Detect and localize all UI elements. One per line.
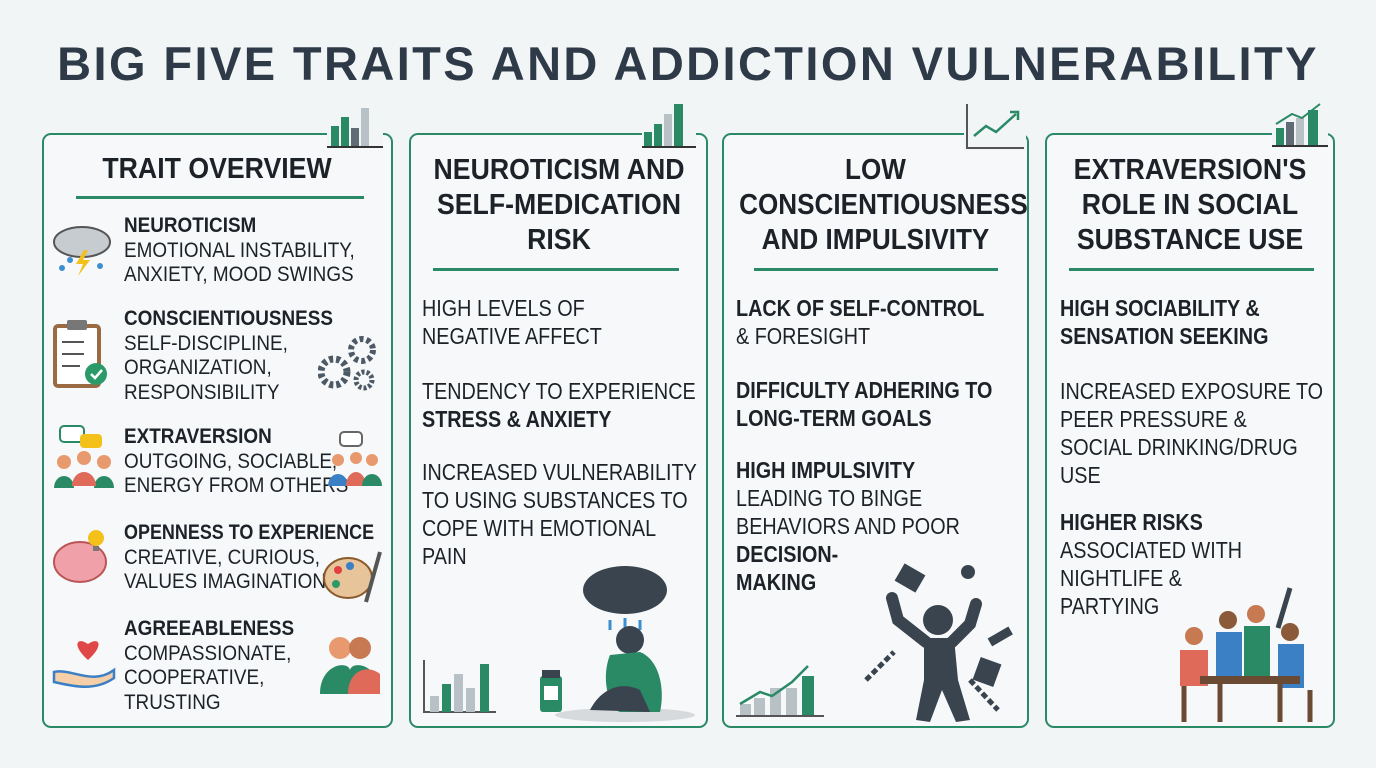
illustration: sad person with cloud bbox=[540, 566, 695, 722]
item: agreeableness: COOPERATIVE, bbox=[124, 666, 264, 689]
panel: neuroticism bbox=[409, 133, 708, 728]
icon: clipboard bbox=[53, 320, 107, 388]
chart: panel 2 small bars bbox=[423, 660, 496, 713]
item: neuroticism: NEUROTICISM bbox=[124, 214, 256, 237]
chart: growth bars bbox=[736, 665, 824, 717]
heading: SELF-MEDICATION bbox=[437, 189, 681, 221]
body text 3: PARTYING bbox=[1060, 593, 1159, 619]
body text 2: STRESS & ANXIETY bbox=[422, 406, 611, 432]
body text 3: TO USING SUBSTANCES TO bbox=[422, 487, 688, 513]
heading: EXTRAVERSION'S bbox=[1074, 154, 1306, 186]
heading: CONSCIENTIOUSNESS bbox=[739, 189, 1028, 221]
item: openness: VALUES IMAGINATION bbox=[124, 570, 326, 593]
body text 2: SOCIAL DRINKING/DRUG bbox=[1060, 434, 1298, 460]
icon: storm cloud bbox=[53, 226, 111, 276]
item: conscientiousness: RESPONSIBILITY bbox=[124, 380, 279, 404]
body text 3 bbox=[736, 457, 960, 595]
body text 3: INCREASED VULNERABILITY bbox=[422, 459, 697, 485]
body text 3 bbox=[1060, 509, 1242, 619]
body text 2: PEER PRESSURE & bbox=[1060, 406, 1247, 432]
body text 1: & FORESIGHT bbox=[736, 323, 870, 349]
icon: people chat bbox=[54, 425, 114, 488]
heading: SUBSTANCE USE bbox=[1077, 224, 1303, 256]
icon: gears bbox=[318, 336, 376, 390]
body text 2: LONG-TERM GOALS bbox=[736, 405, 932, 431]
body text 2: DIFFICULTY ADHERING TO bbox=[736, 377, 992, 403]
body text 3: COPE WITH EMOTIONAL bbox=[422, 515, 656, 541]
illustration: party group bbox=[1180, 587, 1312, 722]
panel: trait overview bbox=[42, 133, 393, 728]
panel: extraversion bbox=[1045, 133, 1335, 728]
heading bbox=[434, 154, 684, 256]
heading bbox=[739, 154, 1028, 256]
body text 1 bbox=[736, 295, 984, 349]
item: extraversion bbox=[124, 425, 348, 497]
body text 3: HIGH IMPULSIVITY bbox=[736, 457, 915, 483]
icon: line chart top bbox=[964, 104, 1026, 149]
item: conscientiousness: ORGANIZATION, bbox=[124, 356, 272, 379]
item: agreeableness: AGREEABLENESS bbox=[124, 617, 294, 640]
item: openness bbox=[124, 521, 374, 593]
body text 2 bbox=[736, 377, 992, 431]
body text 1 bbox=[1060, 295, 1268, 349]
icon: heart hand bbox=[52, 641, 116, 688]
body text 1: HIGH LEVELS OF bbox=[422, 295, 585, 321]
icon: panel 2 bar chart bbox=[642, 104, 696, 148]
heading: RISK bbox=[527, 224, 591, 256]
icon: bar chart panel 1 bbox=[327, 108, 383, 148]
icon: hug bbox=[320, 637, 380, 694]
body text 2: TENDENCY TO EXPERIENCE bbox=[422, 378, 696, 404]
item: agreeableness: TRUSTING bbox=[124, 690, 221, 714]
body text 1: SENSATION SEEKING bbox=[1060, 323, 1268, 349]
body text 2: USE bbox=[1060, 462, 1101, 488]
body text 3: PAIN bbox=[422, 543, 467, 569]
item: neuroticism: ANXIETY, MOOD SWINGS bbox=[124, 263, 354, 286]
illustration: impulsive figure with chains bbox=[864, 563, 1013, 722]
item: neuroticism bbox=[124, 214, 355, 286]
item: conscientiousness: CONSCIENTIOUSNESS bbox=[124, 307, 333, 330]
heading: ROLE IN SOCIAL bbox=[1082, 189, 1298, 221]
item: extraversion: ENERGY FROM OTHERS bbox=[124, 474, 348, 497]
item: agreeableness bbox=[124, 617, 294, 714]
body text 1: HIGH SOCIABILITY & bbox=[1060, 295, 1260, 321]
heading bbox=[1074, 154, 1306, 256]
item: neuroticism: EMOTIONAL INSTABILITY, bbox=[124, 238, 355, 262]
body text 3: DECISION- bbox=[736, 541, 838, 567]
item: conscientiousness bbox=[124, 307, 333, 404]
item: extraversion: OUTGOING, SOCIABLE, bbox=[124, 450, 337, 472]
heading: AND IMPULSIVITY bbox=[762, 224, 989, 256]
body text 1: LACK OF SELF-CONTROL bbox=[736, 295, 984, 321]
body text 2 bbox=[422, 378, 696, 432]
icon: brain bulb bbox=[53, 530, 107, 583]
icon: palette bbox=[323, 552, 382, 602]
item: agreeableness: COMPASSIONATE, bbox=[124, 642, 291, 664]
body text 3: ASSOCIATED WITH bbox=[1060, 537, 1242, 563]
item: conscientiousness: SELF-DISCIPLINE, bbox=[124, 332, 288, 354]
item: extraversion: EXTRAVERSION bbox=[124, 425, 272, 448]
body text 3: LEADING TO BINGE bbox=[736, 485, 922, 511]
title: BIG FIVE TRAITS AND ADDICTION VULNERABILITY bbox=[57, 37, 1319, 90]
icon: chart top panel 4 bbox=[1272, 103, 1328, 147]
item: openness: OPENNESS TO EXPERIENCE bbox=[124, 521, 374, 544]
heading: NEUROTICISM AND bbox=[434, 154, 684, 186]
body text 3: NIGHTLIFE & bbox=[1060, 565, 1182, 591]
body text 1: NEGATIVE AFFECT bbox=[422, 323, 602, 349]
body text 3: MAKING bbox=[736, 569, 816, 595]
body text 1 bbox=[422, 295, 602, 349]
icon: people chat right bbox=[328, 431, 382, 486]
body text 2 bbox=[1060, 378, 1323, 488]
body text 3: HIGHER RISKS bbox=[1060, 509, 1203, 535]
body text 3: BEHAVIORS AND POOR bbox=[736, 513, 960, 539]
body text 2: INCREASED EXPOSURE TO bbox=[1060, 378, 1323, 404]
heading: LOW bbox=[845, 154, 906, 186]
item: openness: CREATIVE, CURIOUS, bbox=[124, 546, 320, 568]
body text 3 bbox=[422, 459, 697, 569]
heading: trait overview: TRAIT OVERVIEW bbox=[102, 153, 332, 185]
panel: low conscientiousness bbox=[722, 133, 1029, 728]
